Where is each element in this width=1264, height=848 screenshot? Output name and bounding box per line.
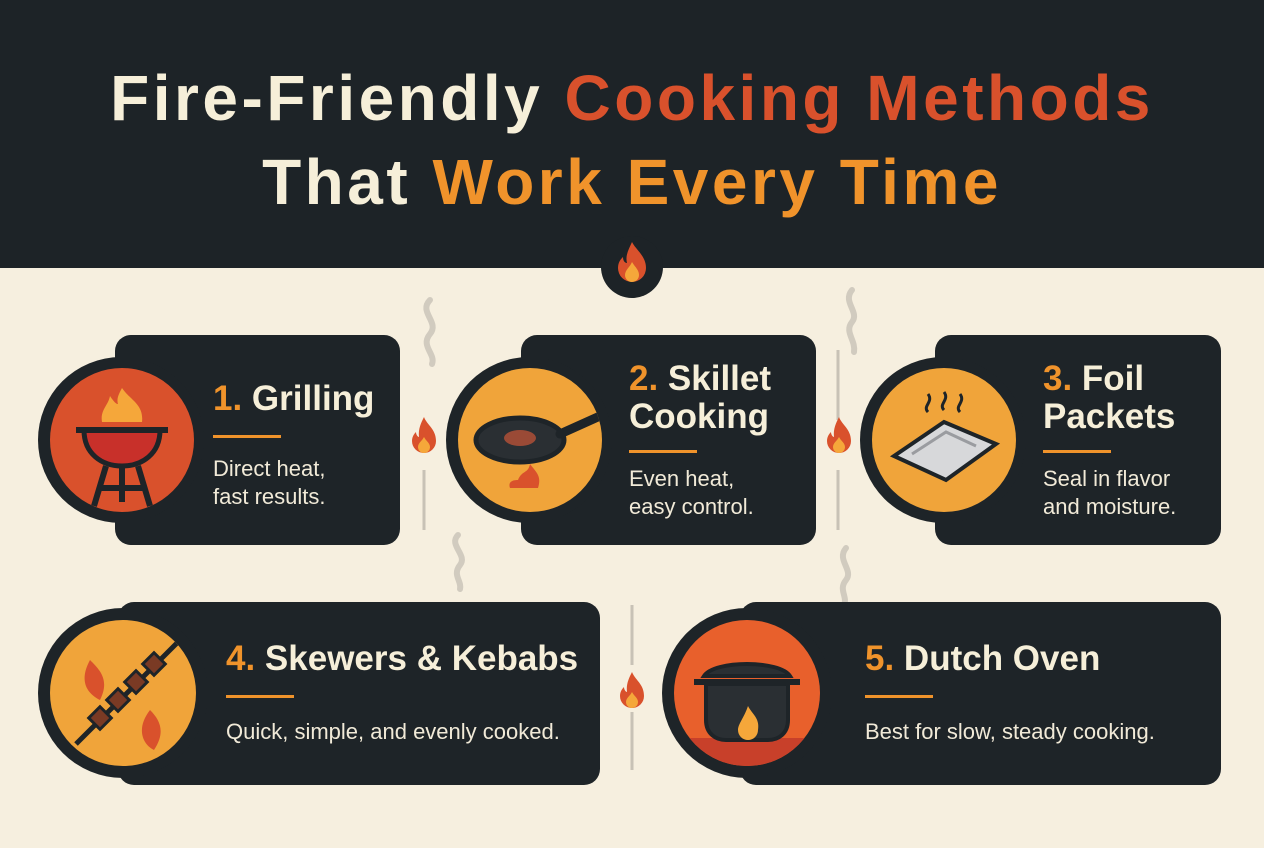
panel: dutch oven: Best for slow, steady cooking. <box>865 719 1155 744</box>
icon: center flame badge <box>601 236 663 298</box>
panel: grilling <box>38 335 400 545</box>
icon: foil packet <box>872 368 1016 512</box>
title <box>110 62 1154 218</box>
icon: small flame 1 <box>412 417 436 453</box>
icon: small flame 2 <box>827 417 851 453</box>
panel: foil packets: Packets <box>1043 397 1175 436</box>
panel: skillet cooking: 2. Skillet <box>629 359 771 398</box>
panel: grilling: 1. Grilling <box>213 379 374 418</box>
panel: skewers & kebabs <box>38 602 600 785</box>
panel: foil packets <box>860 335 1221 545</box>
panel: skewers & kebabs: Quick, simple, and evenly cooked. <box>226 719 560 744</box>
panel: foil packets: 3. Foil <box>1043 359 1144 398</box>
panel: skillet cooking: Cooking <box>629 397 769 436</box>
panel: skillet cooking: easy control. <box>629 494 754 519</box>
icon: small flame 3 <box>620 672 644 708</box>
icon: skewer <box>50 620 196 766</box>
panel: dutch oven: 5. Dutch Oven <box>865 639 1100 678</box>
panel: foil packets: and moisture. <box>1043 494 1176 519</box>
header band <box>0 0 1264 268</box>
panel: dutch oven <box>662 602 1221 785</box>
panel: grilling: Direct heat, <box>213 456 326 481</box>
panel: skewers & kebabs: 4. Skewers & Kebabs <box>226 639 578 678</box>
title: That Work Every Time <box>262 146 1002 218</box>
icon: skillet <box>458 368 602 512</box>
icon: grill <box>50 368 194 512</box>
panel: foil packets: Seal in flavor <box>1043 466 1170 491</box>
panel: skillet cooking: Even heat, <box>629 466 734 491</box>
title: Fire-Friendly Cooking Methods <box>110 62 1154 134</box>
panel: grilling: fast results. <box>213 484 325 509</box>
icon: dutch oven <box>674 620 820 766</box>
panel: skillet cooking <box>446 335 816 545</box>
